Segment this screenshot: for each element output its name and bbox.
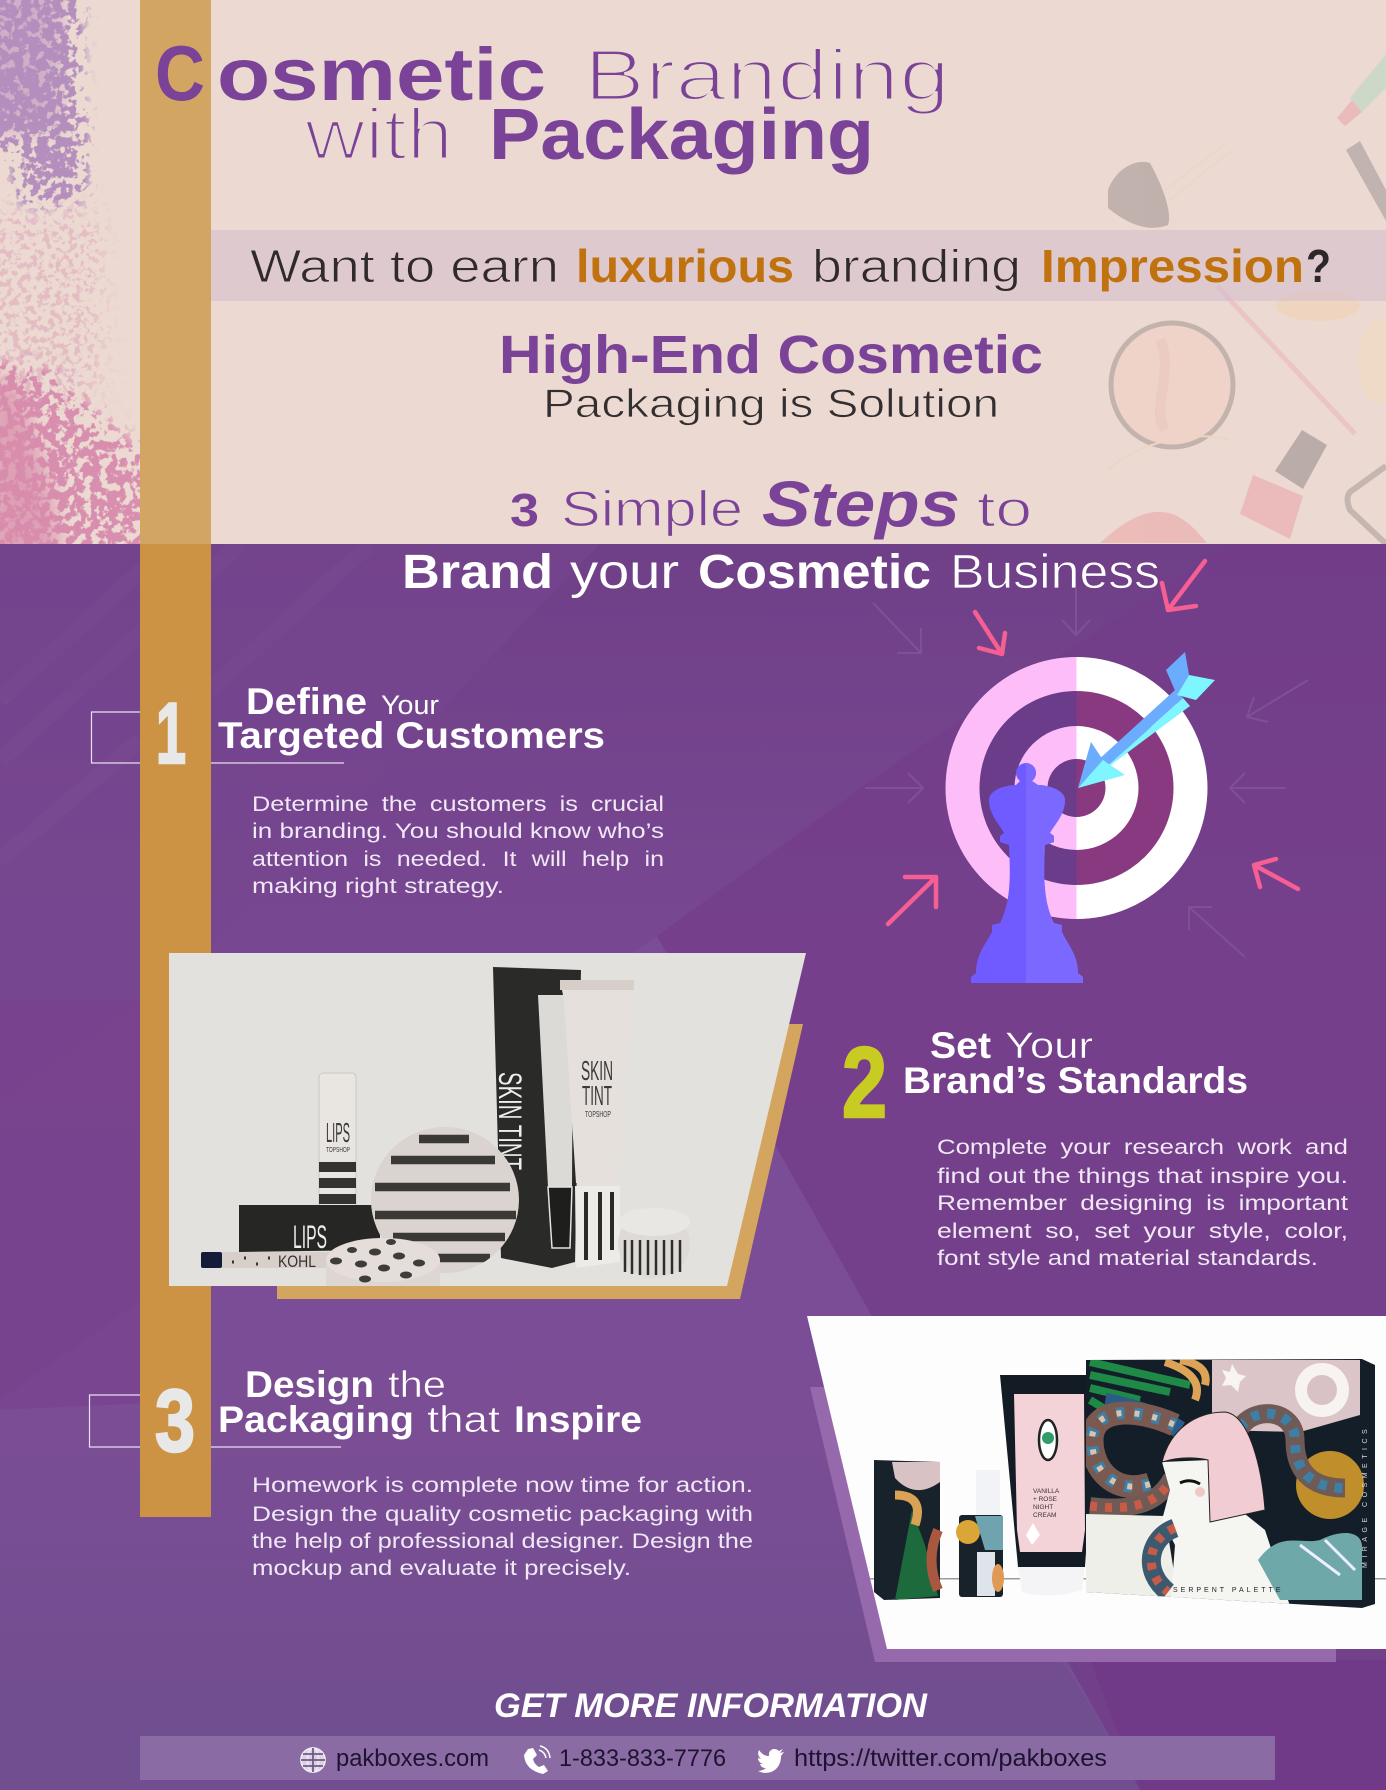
step 3: the bbox=[388, 1364, 446, 1405]
footer contact bar: pakboxes.com bbox=[336, 1745, 489, 1772]
footer contact bar bbox=[140, 1736, 1275, 1780]
step 3: that bbox=[427, 1399, 501, 1440]
title: with bbox=[304, 95, 453, 175]
subheading: high-end cosmetic: Packaging is Solution bbox=[543, 382, 999, 426]
icon: globe bbox=[301, 1748, 325, 1772]
icon: twitter bird bbox=[758, 1749, 784, 1773]
step 3: Homework is complete now time for action. bbox=[252, 1474, 753, 1497]
photo 1: black and white cosmetics: TOPSHOP bbox=[326, 1147, 350, 1154]
footer heading: GET MORE INFORMATION bbox=[494, 1687, 928, 1725]
step 2: Set bbox=[930, 1025, 991, 1066]
icon: target bbox=[946, 657, 1208, 919]
step 2: Brand’s Standards bbox=[903, 1060, 1248, 1101]
step 2: font style and material standards. bbox=[937, 1247, 1318, 1270]
step 1: Determine the customers is crucial bbox=[252, 793, 664, 816]
step 1 bbox=[92, 681, 664, 898]
step 3: Design the quality cosmetic packaging with bbox=[252, 1503, 753, 1526]
pink arrows bbox=[888, 561, 1298, 924]
step 2: Remember designing is important bbox=[937, 1192, 1348, 1215]
photo 2: serpent palette cosmetics: SERPENT PALETTE bbox=[1173, 1587, 1283, 1594]
step 2: element so, set your style, color, bbox=[937, 1220, 1348, 1243]
photo 1: black and white cosmetics: SKIN bbox=[581, 1055, 613, 1086]
title: osmetic bbox=[217, 33, 546, 116]
step 1: in branding. You should know who’s bbox=[252, 820, 664, 843]
question band: branding bbox=[812, 240, 1021, 292]
title: Branding bbox=[584, 36, 950, 116]
faint background arrows bbox=[865, 587, 1308, 957]
footer contact bar: https://twitter.com/pakboxes bbox=[794, 1745, 1107, 1772]
step 1: Targeted Customers bbox=[218, 715, 605, 756]
photo 2: serpent palette cosmetics: NIGHT bbox=[1033, 1504, 1053, 1511]
top background bbox=[0, 0, 1386, 544]
step 1: Your bbox=[381, 690, 439, 720]
question band: Want to earn bbox=[250, 240, 559, 292]
icon: arrow in target bbox=[1078, 652, 1215, 788]
step 2: find out the things that inspire you. bbox=[937, 1165, 1348, 1188]
vertical gold bar bbox=[140, 0, 211, 1517]
photo 1: black and white cosmetics bbox=[169, 953, 806, 1299]
faint cosmetic doodles bbox=[1100, 54, 1386, 544]
heading: 3 simple steps: 3 bbox=[510, 484, 539, 536]
step 1: attention is needed. It will help in bbox=[252, 848, 664, 871]
photo 2: serpent palette cosmetics: MIRAGE COSMETICS bbox=[1362, 1425, 1369, 1568]
purple background bbox=[0, 544, 1386, 1790]
title bbox=[155, 29, 950, 175]
step 1: 1 bbox=[156, 686, 186, 782]
heading: 3 simple steps: Brand bbox=[402, 546, 553, 599]
title: Packaging bbox=[489, 95, 874, 175]
step 2: 2 bbox=[842, 1027, 887, 1139]
photo 1: black and white cosmetics: LIPS bbox=[326, 1117, 350, 1148]
step 1: making right strategy. bbox=[252, 875, 504, 898]
heading: 3 simple steps bbox=[402, 468, 1160, 599]
heading: 3 simple steps: your bbox=[570, 546, 679, 599]
photo 1: black and white cosmetics: TINT bbox=[582, 1080, 612, 1111]
heading: 3 simple steps: Simple bbox=[561, 481, 743, 537]
question band: Impression bbox=[1041, 240, 1304, 292]
question band: luxurious bbox=[576, 240, 794, 292]
step 3: Packaging bbox=[218, 1399, 414, 1440]
step 2: Complete your research work and bbox=[937, 1136, 1348, 1159]
step 3: 3 bbox=[155, 1371, 195, 1470]
heading: 3 simple steps: Cosmetic bbox=[698, 546, 931, 599]
photo 1: black and white cosmetics: SKIN TINT bbox=[492, 1072, 528, 1170]
photo 1: black and white cosmetics: LIPS bbox=[293, 1219, 327, 1255]
title: C bbox=[155, 29, 205, 117]
step 3: Inspire bbox=[514, 1399, 642, 1440]
photo 2: serpent palette cosmetics bbox=[807, 1316, 1386, 1662]
step 2: Your bbox=[1005, 1025, 1093, 1066]
step 3: mockup and evaluate it precisely. bbox=[252, 1557, 631, 1580]
heading: 3 simple steps: Business bbox=[950, 546, 1160, 599]
icon: phone bbox=[524, 1746, 550, 1774]
photo 2: serpent palette cosmetics: CREAM bbox=[1033, 1512, 1056, 1519]
photo 1: black and white cosmetics: TOPSHOP bbox=[585, 1110, 611, 1119]
question band: ? bbox=[1306, 240, 1331, 292]
heading: 3 simple steps: Steps bbox=[762, 468, 960, 540]
step 3: Design bbox=[245, 1364, 374, 1405]
powder texture bbox=[0, 0, 150, 560]
icon: chess king bbox=[971, 763, 1083, 983]
step 3: the help of professional designer. Design the bbox=[252, 1530, 753, 1553]
step 3 bbox=[90, 1364, 753, 1580]
question band bbox=[211, 230, 1386, 301]
photo 2: serpent palette cosmetics: VANILLA bbox=[1033, 1488, 1060, 1495]
subheading: high-end cosmetic bbox=[499, 325, 1043, 426]
subheading: high-end cosmetic: High-End Cosmetic bbox=[499, 325, 1043, 385]
photo 2: serpent palette cosmetics: + ROSE bbox=[1033, 1496, 1058, 1503]
step 1: Define bbox=[246, 681, 367, 722]
footer contact bar: 1-833-833-7776 bbox=[559, 1745, 726, 1772]
heading: 3 simple steps: to bbox=[977, 481, 1032, 537]
step 2 bbox=[842, 1025, 1348, 1270]
photo 1: black and white cosmetics: KOHL bbox=[278, 1252, 316, 1271]
